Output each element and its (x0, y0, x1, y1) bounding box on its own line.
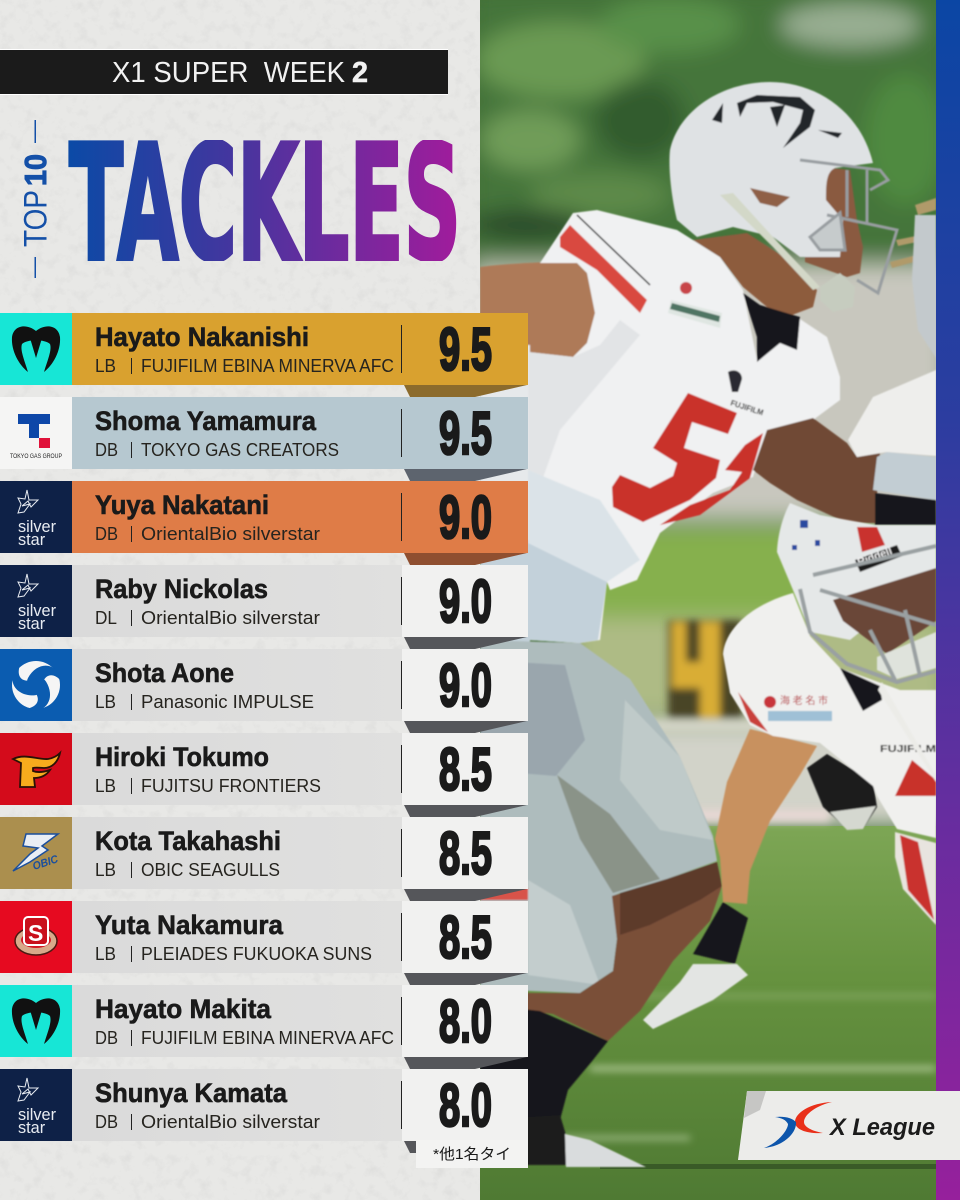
top banner: X1 SUPER WEEK 2: 2 (352, 57, 368, 89)
sponsor patch (668, 282, 722, 328)
logo: silverstar (0, 1069, 72, 1141)
row 4: Raby Nickolas: DL (95, 607, 117, 628)
jersey (723, 593, 936, 838)
torso behind score bars (480, 345, 530, 560)
row 9: Hayato Makita: FUJIFILM EBINA MINERVA AFC (141, 1027, 394, 1048)
row 6: Hiroki Tokumo (0, 733, 528, 817)
row 6: Hiroki Tokumo: FUJITSU FRONTIERS (141, 775, 321, 796)
face (833, 568, 936, 654)
X League logo plate: X League (828, 1114, 935, 1141)
row 3: Yuya Nakatani (0, 481, 528, 565)
row 3: Yuya Nakatani: 9.0 (439, 484, 492, 551)
sponsor patch (764, 694, 832, 721)
black collar (743, 293, 800, 362)
row 9: Hayato Makita: 8.0 (439, 988, 492, 1055)
helmet (777, 503, 936, 640)
photo background: blurred stadium, foliage and field (470, 0, 950, 1200)
logo: silverstar: star (18, 531, 46, 549)
photo: tackling player with helmet and jersey 51 (480, 82, 936, 1167)
row 8: Yuta Nakamura: Yuta Nakamura (95, 910, 284, 940)
scoreboard and field lines (560, 620, 936, 1140)
logo: silverstar: silver (18, 1106, 57, 1124)
right arm (753, 418, 880, 523)
blue to purple side strip (936, 0, 960, 1200)
FUJIFILM patch: FUJIFILM (729, 398, 765, 418)
concrete textured left panel (0, 0, 480, 1200)
row 1: Hayato Nakanishi (0, 313, 528, 397)
row 6: Hiroki Tokumo: 8.5 (439, 736, 492, 803)
row 9: Hayato Makita: Hayato Makita (95, 994, 272, 1024)
row 2: Shoma Yamamura: Shoma Yamamura (95, 406, 317, 436)
helmet shell (669, 82, 873, 257)
FUJIFILM patch (728, 370, 765, 418)
facemask (800, 546, 936, 682)
X League logo plate (738, 1091, 960, 1160)
row 3: Yuya Nakatani: Yuya Nakatani (95, 490, 269, 520)
logo: silverstar: silver (18, 518, 57, 536)
row 2: Shoma Yamamura (0, 397, 528, 481)
logo: Pleiades Suns: S (28, 920, 43, 946)
vertical label: TOP 10: TOP (18, 190, 54, 247)
photo: second player diving (643, 503, 936, 1029)
Riddell mark: Riddell (856, 545, 894, 569)
sock (480, 1004, 608, 1135)
row 8: Yuta Nakamura: PLEIADES FUKUOKA SUNS (141, 943, 372, 964)
shoulder stripe (560, 225, 647, 313)
logo: Pleiades Suns (0, 901, 72, 973)
row 7: Kota Takahashi: LB (95, 859, 116, 880)
text: TACKLES (69, 110, 461, 297)
logo: silverstar: star (18, 615, 46, 633)
arm (715, 729, 817, 904)
row 5: Shota Aone: LB (95, 691, 116, 712)
row 10: Shunya Kamata: 8.0 (439, 1072, 492, 1139)
logo: Obic Seagulls (0, 817, 72, 889)
black neck (840, 668, 882, 711)
row 10: Shunya Kamata: Shunya Kamata (95, 1078, 288, 1108)
row 9: Hayato Makita: DB (95, 1027, 118, 1048)
wrist band (693, 902, 748, 964)
chin strap (878, 682, 936, 782)
row 7: Kota Takahashi: OBIC SEAGULLS (141, 859, 280, 880)
vertical label: TOP 10: 10 (18, 154, 53, 186)
ear hole (750, 188, 790, 207)
shorts (895, 832, 936, 925)
face (805, 165, 863, 277)
row 6: Hiroki Tokumo: Hiroki Tokumo (95, 742, 269, 772)
left arm (480, 262, 595, 357)
row 1: Hayato Nakanishi: Hayato Nakanishi (95, 322, 309, 352)
row 4: Raby Nickolas: 9.0 (439, 568, 492, 635)
row 8: Yuta Nakamura: 8.5 (439, 904, 492, 971)
sponsor text: FUJIFILM (880, 744, 936, 755)
background helmet (912, 215, 936, 358)
thigh and calf (480, 862, 722, 1041)
trouser stripe behind bars (480, 888, 528, 900)
chin strap (720, 193, 820, 290)
row 10: Shunya Kamata: OrientalBio silverstar (141, 1111, 320, 1132)
back hand (807, 754, 877, 829)
logo: silverstar: star (18, 1119, 46, 1137)
row 4: Raby Nickolas: OrientalBio silverstar (141, 607, 320, 628)
rope (890, 198, 936, 268)
top banner: X1 SUPER WEEK 2 (0, 49, 448, 95)
wrist tape (873, 452, 936, 500)
vertical label: TOP 10 (18, 120, 54, 278)
helmet logo (712, 95, 842, 148)
row 1: Hayato Nakanishi: FUJIFILM EBINA MINERVA AFC (141, 355, 394, 376)
row 5: Shota Aone: 9.0 (439, 652, 492, 719)
row 10: Shunya Kamata (0, 1069, 528, 1153)
row 10: Shunya Kamata: DB (95, 1111, 118, 1132)
row 2: Shoma Yamamura: DB (95, 439, 118, 460)
row 1: Hayato Nakanishi: LB (95, 355, 116, 376)
logo: Tokyo Gas: TOKYO GAS GROUP (10, 454, 62, 460)
row 8: Yuta Nakamura: LB (95, 943, 116, 964)
number 51 (612, 393, 763, 525)
logo: Minerva (0, 985, 72, 1057)
row 4: Raby Nickolas: Raby Nickolas (95, 574, 268, 604)
row 7: Kota Takahashi: Kota Takahashi (95, 826, 281, 856)
helmet paint flecks (792, 520, 820, 550)
row 1: Hayato Nakanishi: 9.5 (439, 316, 492, 383)
logo: Fujitsu Frontiers (0, 733, 72, 805)
row 9: Hayato Makita (0, 985, 528, 1069)
row 3: Yuya Nakatani: OrientalBio silverstar (141, 523, 320, 544)
facemask (800, 160, 897, 293)
footnote: tied players: *他1名タイ (433, 1146, 511, 1163)
glove (643, 964, 748, 1029)
background jersey (848, 370, 936, 457)
jersey (528, 210, 840, 643)
icon: X League mark (764, 1102, 832, 1148)
row 8: Yuta Nakamura (0, 901, 528, 985)
row 5: Shota Aone (0, 649, 528, 733)
neck (693, 233, 817, 317)
row 2: Shoma Yamamura: TOKYO GAS CREATORS (141, 439, 339, 460)
logo: Obic Seagulls: OBIC (31, 853, 61, 873)
shoe (480, 1115, 575, 1165)
logo: Tokyo Gas (0, 397, 72, 469)
logo: Minerva (0, 313, 72, 385)
row 5: Shota Aone: Panasonic IMPULSE (141, 691, 314, 712)
logo: silverstar (0, 481, 72, 553)
row 5: Shota Aone: Shota Aone (95, 658, 234, 688)
row 6: Hiroki Tokumo: LB (95, 775, 116, 796)
top banner: X1 SUPER WEEK 2: X1 SUPER WEEK (112, 57, 346, 89)
row 2: Shoma Yamamura: 9.5 (439, 400, 492, 467)
mesh side panel (528, 320, 640, 520)
logo: silverstar: silver (18, 602, 57, 620)
sponsor patch: 海老名市 (780, 694, 828, 707)
row 7: Kota Takahashi: 8.5 (439, 820, 492, 887)
row 3: Yuya Nakatani: DB (95, 523, 118, 544)
logo: silverstar (0, 565, 72, 637)
row 4: Raby Nickolas (0, 565, 528, 649)
footnote: tied players (416, 1140, 528, 1168)
row 7: Kota Takahashi (0, 817, 528, 901)
pants (480, 640, 717, 993)
logo: Panasonic Impulse (0, 649, 72, 721)
